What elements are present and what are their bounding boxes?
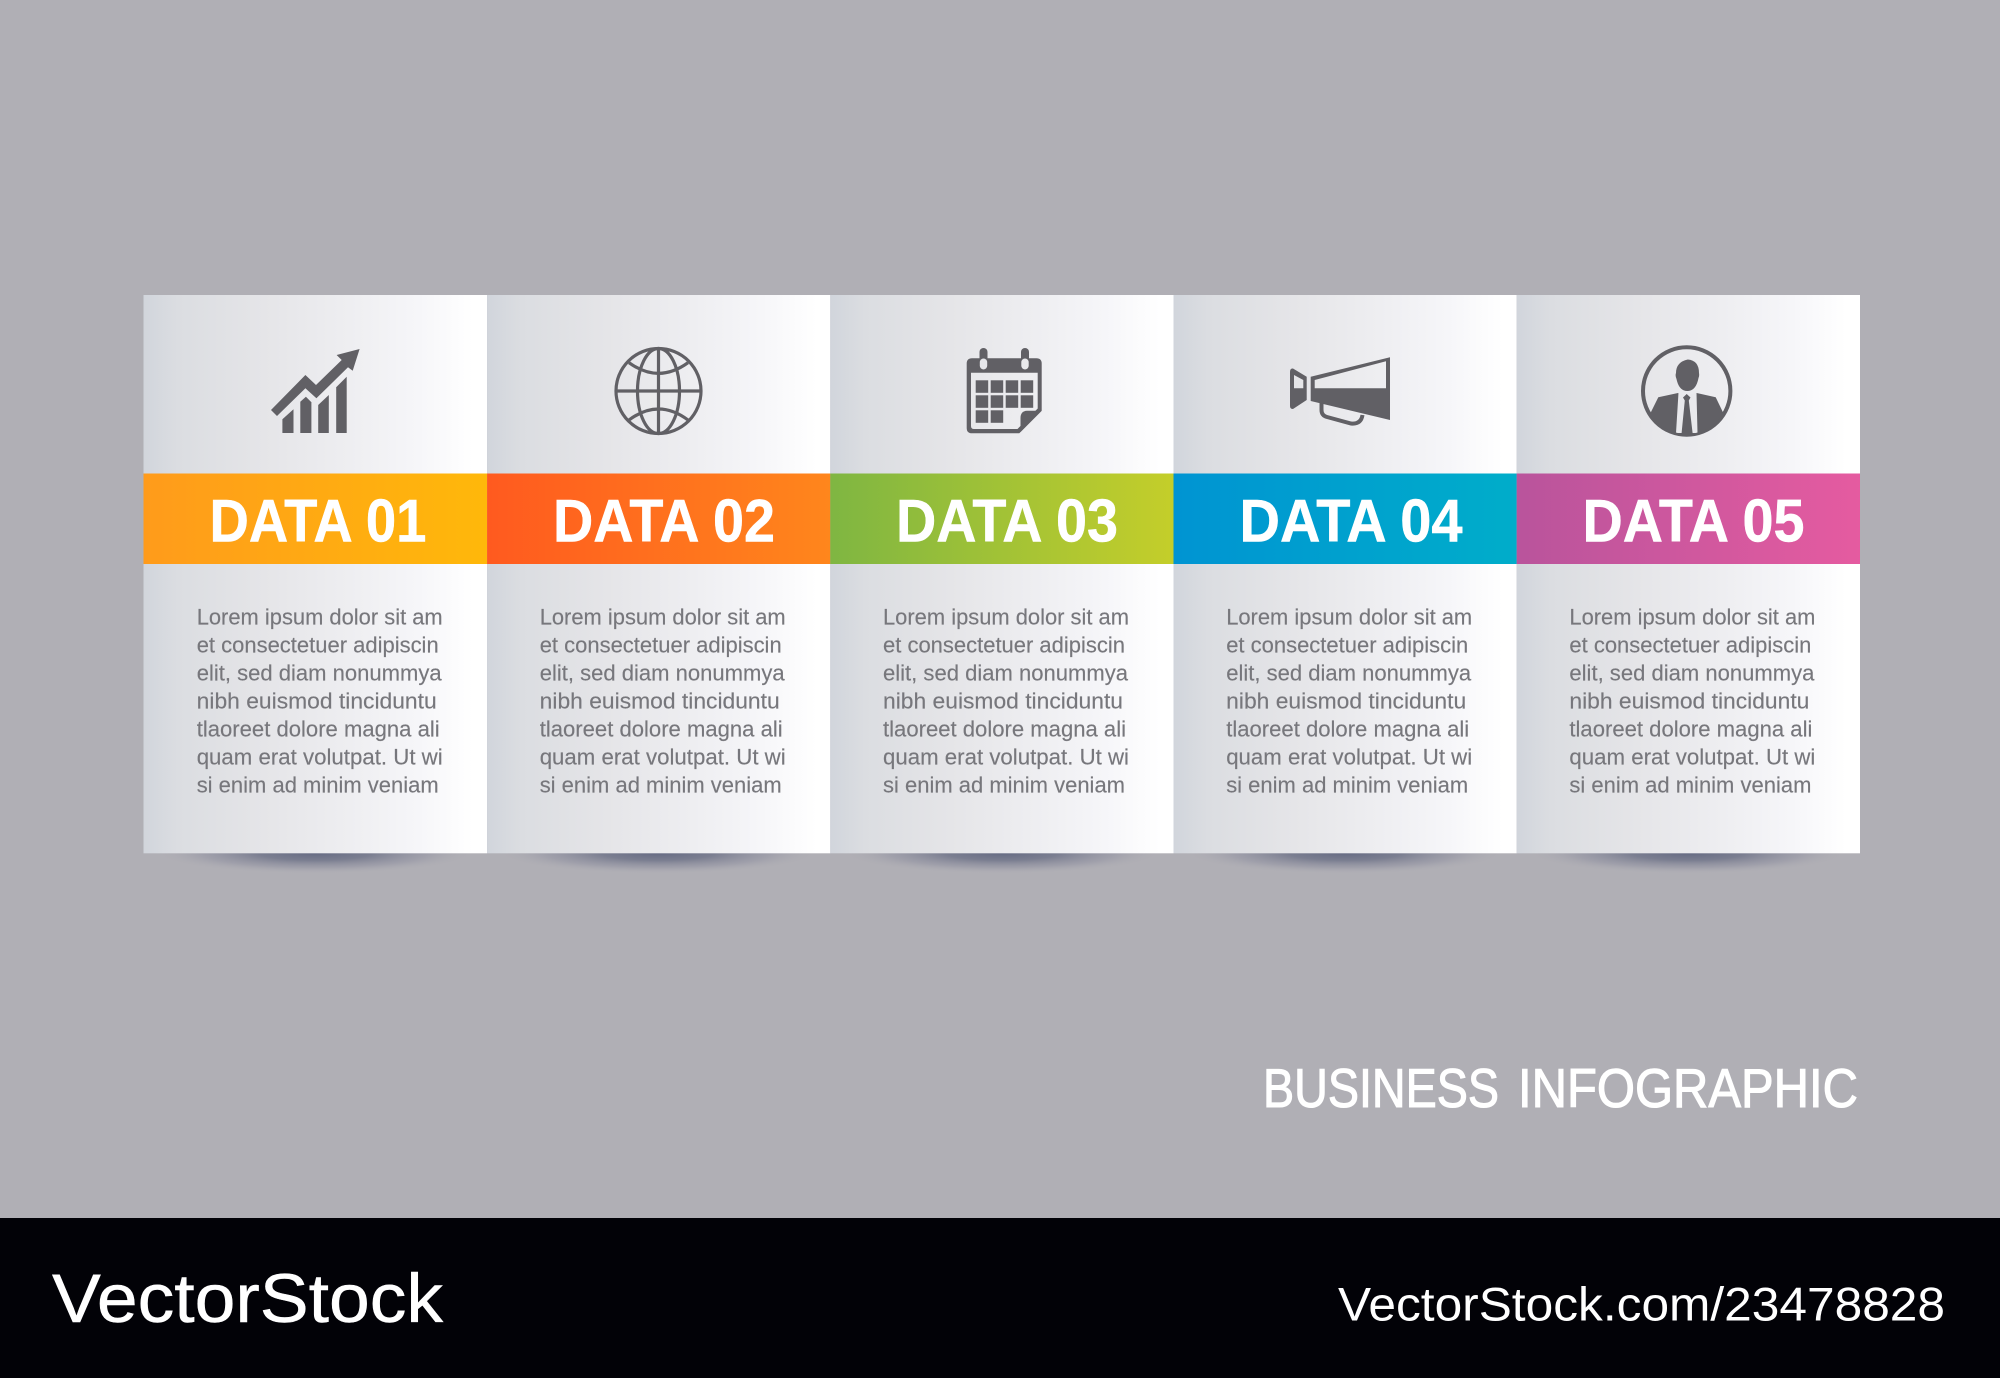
- title: [1263, 1057, 1858, 1119]
- body text: data 03: quam erat volutpat. Ut wi: [883, 745, 1129, 770]
- body text: data 03: elit, sed diam nonummya: [883, 661, 1128, 686]
- body text: data 04: quam erat volutpat. Ut wi: [1226, 745, 1472, 770]
- title: INFOGRAPHIC: [1518, 1057, 1858, 1119]
- body text: data 04: et consectetuer adipiscin: [1226, 633, 1468, 658]
- body text: data 04: nibh euismod tinciduntu: [1226, 689, 1466, 714]
- heading: data 01: DATA 01: [210, 488, 426, 554]
- infographic canvas: [0, 295, 2000, 1378]
- body text: data 03: nibh euismod tinciduntu: [883, 689, 1123, 714]
- body text: data 05: tlaoreet dolore magna ali: [1569, 717, 1812, 742]
- icon: globe: [616, 348, 701, 434]
- panel: data 02: [487, 295, 830, 853]
- footer bar: [0, 1218, 2000, 1378]
- colour band: data 04: [1174, 474, 1517, 564]
- title: BUSINESS: [1263, 1057, 1499, 1119]
- body text: data 04: si enim ad minim veniam: [1226, 772, 1468, 797]
- heading: data 03: DATA 03: [896, 488, 1118, 554]
- heading: data 04: DATA 04: [1240, 488, 1463, 554]
- colour band: data 05: [1517, 474, 1860, 564]
- icon: rising bar chart: [271, 349, 360, 433]
- body text: data 05: si enim ad minim veniam: [1569, 772, 1811, 797]
- icon: businessman: [1643, 347, 1730, 436]
- body text: data 01: si enim ad minim veniam: [197, 772, 439, 797]
- colour band: data 03: [830, 474, 1174, 564]
- body text: data 03: Lorem ipsum dolor sit am: [883, 605, 1129, 630]
- body text: data 04: [1226, 605, 1472, 797]
- body text: data 03: et consectetuer adipiscin: [883, 633, 1125, 658]
- body text: data 04: tlaoreet dolore magna ali: [1226, 717, 1469, 742]
- panel: data 03: [830, 295, 1174, 853]
- body text: data 02: nibh euismod tinciduntu: [540, 689, 780, 714]
- panel: data 01: [144, 295, 487, 853]
- body text: data 05: [1569, 605, 1815, 797]
- body text: data 02: et consectetuer adipiscin: [540, 633, 782, 658]
- body text: data 01: nibh euismod tinciduntu: [197, 689, 437, 714]
- body text: data 02: Lorem ipsum dolor sit am: [540, 605, 786, 630]
- body text: data 05: quam erat volutpat. Ut wi: [1569, 745, 1815, 770]
- body text: data 05: Lorem ipsum dolor sit am: [1569, 605, 1815, 630]
- body text: data 03: tlaoreet dolore magna ali: [883, 717, 1126, 742]
- body text: data 01: tlaoreet dolore magna ali: [197, 717, 440, 742]
- body text: data 01: quam erat volutpat. Ut wi: [197, 745, 443, 770]
- footer logo: VectorStock: [52, 1260, 444, 1337]
- colour band: data 02: [487, 474, 830, 564]
- panel: data 04: [1174, 295, 1517, 853]
- body text: data 03: [883, 605, 1129, 797]
- body text: data 04: Lorem ipsum dolor sit am: [1226, 605, 1472, 630]
- body text: data 04: elit, sed diam nonummya: [1226, 661, 1472, 686]
- body text: data 02: si enim ad minim veniam: [540, 772, 782, 797]
- body text: data 05: elit, sed diam nonummya: [1569, 661, 1815, 686]
- body text: data 01: elit, sed diam nonummya: [197, 661, 442, 686]
- panel: data 05: [1517, 295, 1860, 853]
- body text: data 02: elit, sed diam nonummya: [540, 661, 785, 686]
- footer url: VectorStock.com/23478828: [1338, 1278, 1945, 1330]
- icon: megaphone: [1290, 357, 1390, 424]
- body text: data 02: quam erat volutpat. Ut wi: [540, 745, 786, 770]
- panel shadows: [155, 853, 1848, 874]
- heading: data 05: DATA 05: [1582, 488, 1804, 554]
- body text: data 01: Lorem ipsum dolor sit am: [197, 605, 443, 630]
- body text: data 03: si enim ad minim veniam: [883, 772, 1125, 797]
- body text: data 02: tlaoreet dolore magna ali: [540, 717, 783, 742]
- heading: data 02: DATA 02: [553, 488, 775, 554]
- body text: data 05: et consectetuer adipiscin: [1569, 633, 1811, 658]
- colour band: data 01: [144, 474, 487, 564]
- body text: data 01: [197, 605, 443, 797]
- icon: calendar: [967, 348, 1042, 433]
- body text: data 05: nibh euismod tinciduntu: [1569, 689, 1809, 714]
- body text: data 01: et consectetuer adipiscin: [197, 633, 439, 658]
- body text: data 02: [540, 605, 786, 797]
